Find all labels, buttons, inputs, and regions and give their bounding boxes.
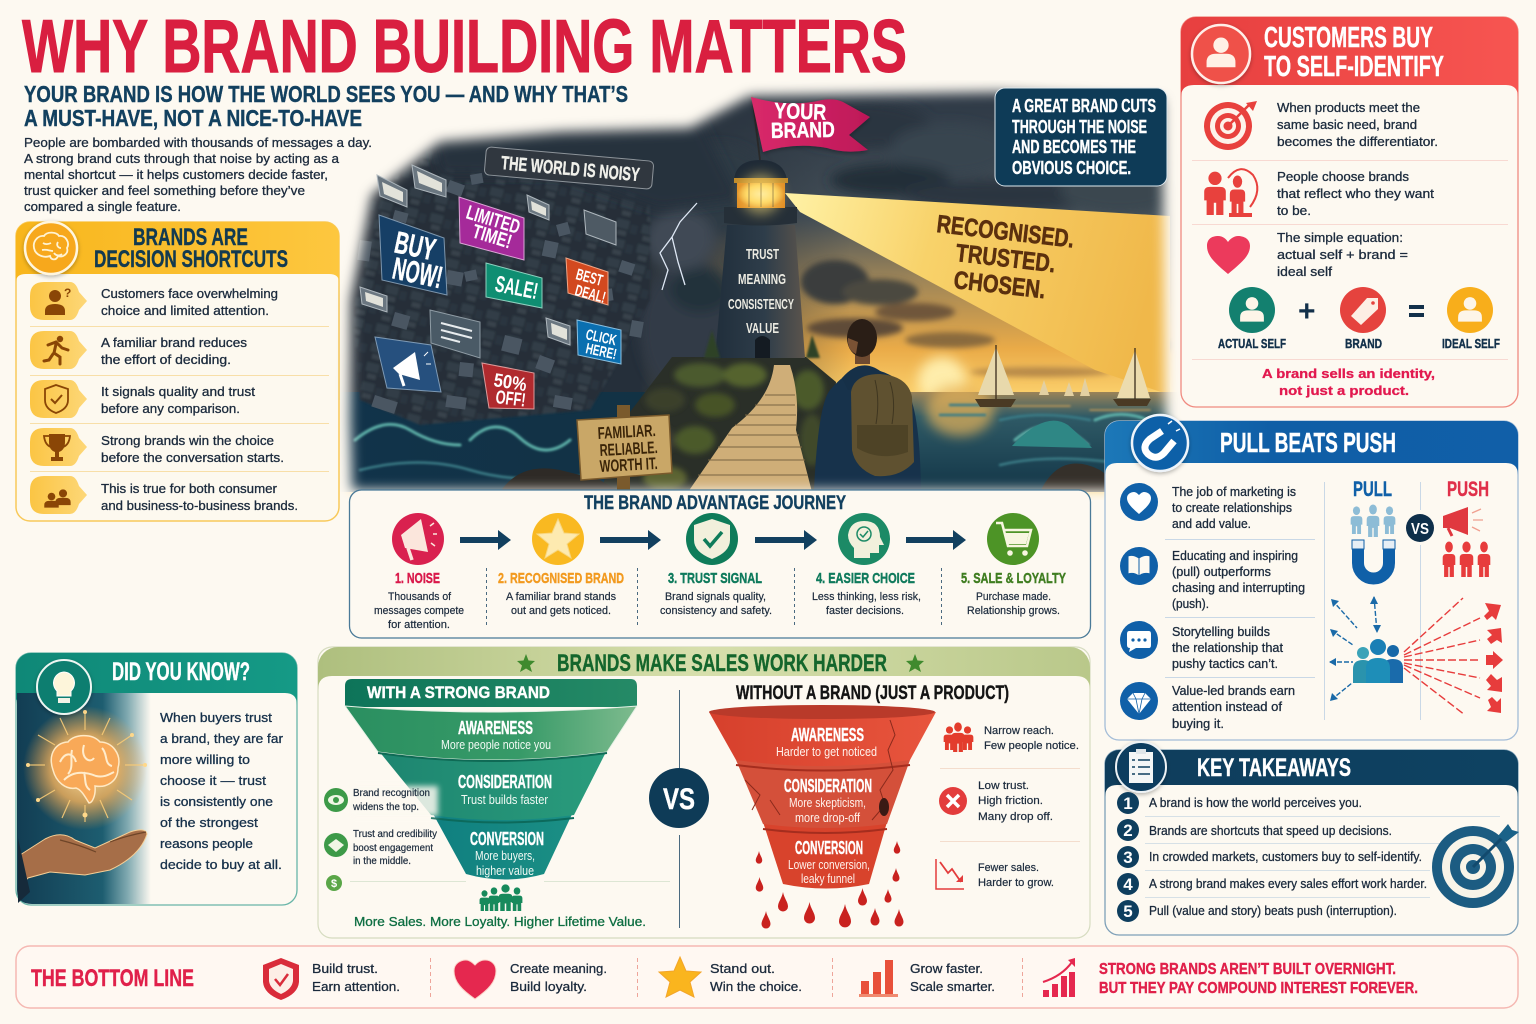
intro paragraph: People are bombarded with thousands of messages a day. bbox=[24, 135, 372, 150]
sign: best deal: BEST bbox=[574, 266, 605, 290]
item: stand out: Stand out. bbox=[710, 961, 775, 976]
sign: sale bbox=[486, 263, 542, 308]
row: consumer and b2b: This is true for both consumer bbox=[101, 481, 278, 496]
sign: buy now bbox=[379, 215, 447, 295]
takeaway 3 bbox=[1117, 846, 1422, 868]
traveller bbox=[814, 319, 921, 490]
text: decide to buy at all. bbox=[160, 857, 282, 872]
takeaway 4 bbox=[1117, 873, 1427, 895]
note: widens the top: widens the top. bbox=[352, 802, 419, 813]
item: value-led: buying it. bbox=[1172, 716, 1224, 731]
closing line bbox=[1262, 366, 1435, 398]
funnel: strong brand bbox=[345, 679, 637, 880]
message wall bbox=[352, 140, 650, 425]
text: reasons people bbox=[160, 836, 253, 851]
row: quality and trust: before any comparison. bbox=[101, 401, 240, 416]
note: fewer sales: Harder to grow. bbox=[978, 877, 1054, 889]
sign: limited time: LIMITED bbox=[464, 202, 523, 239]
note: trust in the middle: boost engagement bbox=[353, 843, 433, 854]
item: educating: (push). bbox=[1172, 596, 1209, 611]
heading: DECISION SHORTCUTS bbox=[94, 246, 288, 273]
funnel: strong brand: CONSIDERATION bbox=[458, 772, 552, 792]
intro paragraph bbox=[24, 135, 372, 214]
step 5: sale and loyalty: Purchase made. bbox=[976, 591, 1051, 603]
item: meaning bbox=[454, 960, 607, 999]
intro paragraph: A strong brand cuts through that noise by acting as a bbox=[24, 151, 340, 166]
sign: click here: CLICK bbox=[584, 326, 618, 349]
takeaway 2: 2 bbox=[1123, 821, 1133, 840]
step 2: recognised brand bbox=[498, 513, 624, 617]
note: trust in the middle bbox=[324, 829, 437, 867]
funnel: leaky bbox=[709, 705, 936, 888]
note: low trust: High friction. bbox=[978, 795, 1043, 807]
item: relationships: and add value. bbox=[1172, 516, 1251, 531]
funnel: strong brand: More buyers, bbox=[475, 848, 535, 863]
item: value-led: attention instead of bbox=[1172, 699, 1282, 714]
icon: dollar: $ bbox=[331, 878, 337, 890]
sign: click here: HERE! bbox=[584, 340, 618, 363]
sign: 50% off: 50% bbox=[492, 370, 528, 396]
funnel: strong brand: Trust builds faster bbox=[461, 792, 549, 807]
icon: magnet bbox=[1352, 540, 1395, 578]
arrow bbox=[755, 530, 817, 550]
sign: text panel bbox=[430, 310, 480, 358]
text: differentiator bbox=[1277, 100, 1438, 149]
item: educating: (pull) outperforms bbox=[1172, 564, 1271, 579]
closing line: not just a product. bbox=[1279, 383, 1409, 398]
step 3: trust signal: 3. TRUST SIGNAL bbox=[668, 571, 762, 587]
closing message: BUT THEY PAY COMPOUND INTEREST FOREVER. bbox=[1099, 980, 1418, 997]
item: storytelling: Storytelling builds bbox=[1172, 624, 1270, 639]
step 4: easier choice: faster decisions. bbox=[826, 605, 904, 617]
text: reflect bbox=[1277, 169, 1434, 218]
text: is consistently one bbox=[160, 794, 273, 809]
step 1: noise: messages compete bbox=[374, 605, 464, 617]
funnel: leaky: leaky funnel bbox=[801, 872, 855, 886]
closing message bbox=[1099, 961, 1418, 997]
sign: click here bbox=[577, 320, 621, 364]
step 4: easier choice bbox=[812, 513, 921, 617]
tower labels: TRUST bbox=[746, 246, 779, 263]
note: narrow reach bbox=[944, 722, 1079, 752]
panel: pull beats push bbox=[1105, 415, 1518, 740]
icon: attracted people bbox=[1351, 504, 1395, 537]
item: trust: Build trust. bbox=[312, 961, 378, 976]
step 2: recognised brand: out and gets noticed. bbox=[511, 605, 611, 617]
takeaway 5: Pull (value and story) beats push (interruption). bbox=[1149, 903, 1397, 918]
closing line: A brand sells an identity, bbox=[1262, 366, 1435, 381]
vs badge: VS bbox=[663, 783, 695, 816]
takeaway 4: 4 bbox=[1123, 875, 1133, 894]
note: trust in the middle: Trust and credibility bbox=[353, 829, 437, 840]
heading: CUSTOMERS BUY bbox=[1264, 22, 1433, 54]
island bbox=[600, 357, 836, 492]
row: reduces effort: A familiar brand reduces bbox=[101, 335, 248, 350]
step 1: noise: Thousands of bbox=[388, 591, 452, 603]
star left bbox=[517, 654, 535, 672]
row: win the choice: before the conversation starts. bbox=[101, 450, 284, 465]
heading: DID YOU KNOW? bbox=[112, 658, 250, 686]
star right bbox=[906, 654, 924, 672]
item: grow bbox=[859, 960, 995, 997]
takeaway 2: Brands are shortcuts that speed up decisions. bbox=[1149, 823, 1392, 838]
icon: target bbox=[1204, 101, 1257, 150]
text: more willing to bbox=[160, 752, 250, 767]
equation: actual self bbox=[1218, 287, 1286, 351]
step 4: easier choice: 4. EASIER CHOICE bbox=[816, 571, 915, 587]
icon: magnet badge bbox=[1132, 415, 1188, 471]
text: differentiator: becomes the differentiator. bbox=[1277, 134, 1438, 149]
tower labels: VALUE bbox=[746, 320, 779, 337]
equation: brand bbox=[1340, 287, 1386, 351]
arrow bbox=[460, 530, 511, 550]
step 2: recognised brand: A familiar brand stands bbox=[506, 591, 616, 603]
callout: cuts through the noise: A GREAT BRAND CUTS bbox=[1012, 96, 1156, 116]
item: grow: Grow faster. bbox=[910, 961, 983, 976]
icons: envelopes bbox=[360, 165, 616, 345]
sun bbox=[918, 357, 966, 405]
icon: audience bbox=[1353, 639, 1403, 683]
wooden sign bbox=[577, 405, 672, 490]
item: compound growth icon bbox=[1043, 958, 1075, 997]
text: a brand, they are far bbox=[160, 731, 284, 746]
text: choose it — trust bbox=[160, 773, 266, 788]
result line: More Sales. More Loyalty. Higher Lifetime Value. bbox=[354, 914, 646, 929]
funnel: leaky: More skepticism, bbox=[789, 796, 866, 810]
item: grow: Scale smarter. bbox=[910, 979, 995, 994]
intro paragraph: compared a single feature. bbox=[24, 199, 181, 214]
intro paragraph: mental shortcut — it helps customers decide faster, bbox=[24, 167, 328, 182]
equals sign bbox=[1409, 305, 1424, 317]
takeaway 1 bbox=[1117, 792, 1362, 814]
note: fewer sales: Fewer sales. bbox=[978, 862, 1039, 874]
funnel: strong brand: WITH A STRONG BRAND bbox=[367, 683, 550, 702]
step 3: trust signal: Brand signals quality, bbox=[665, 591, 766, 603]
wooden sign: FAMILIAR. bbox=[597, 421, 656, 443]
panel: the bottom line bbox=[16, 946, 1518, 1008]
tower labels: MEANING bbox=[738, 271, 786, 288]
arrow bbox=[906, 530, 966, 550]
intro paragraph: trust quicker and feel something before they’ve bbox=[24, 183, 305, 198]
light beam bbox=[785, 193, 1170, 395]
row: consumer and b2b bbox=[30, 476, 298, 514]
step 3: trust signal: consistency and safety. bbox=[660, 605, 772, 617]
item: stand out: Win the choice. bbox=[710, 979, 802, 994]
heading: KEY TAKEAWAYS bbox=[1197, 754, 1351, 782]
sign: best deal bbox=[566, 258, 608, 307]
row: quality and trust bbox=[30, 380, 255, 418]
beam text: TRUSTED. bbox=[954, 239, 1057, 278]
funnel: leaky: Lower conversion, bbox=[788, 858, 870, 872]
item: value-led bbox=[1120, 682, 1295, 731]
text: equation: The simple equation: bbox=[1277, 230, 1403, 245]
item: trust: Earn attention. bbox=[312, 979, 400, 994]
flag: your brand: YOUR bbox=[774, 98, 827, 125]
icon: target bbox=[1432, 824, 1519, 908]
item: value-led: Value-led brands earn bbox=[1172, 683, 1295, 698]
callout: cuts through the noise bbox=[995, 88, 1167, 186]
note: widens the top: Brand recognition bbox=[353, 788, 430, 799]
text bbox=[160, 710, 284, 872]
item: educating: Educating and inspiring bbox=[1172, 548, 1298, 563]
vs badge: VS bbox=[1411, 521, 1429, 538]
takeaway 3: In crowded markets, customers buy to self-identify. bbox=[1149, 849, 1422, 864]
panel: brand advantage journey bbox=[350, 490, 1090, 638]
heading: THE BRAND ADVANTAGE JOURNEY bbox=[584, 493, 846, 514]
item: relationships: The job of marketing is bbox=[1172, 484, 1296, 499]
note: narrow reach: Narrow reach. bbox=[984, 725, 1054, 737]
panel: key takeaways bbox=[1105, 742, 1519, 935]
funnel: strong brand: More people notice you bbox=[441, 737, 551, 752]
text: of the strongest bbox=[160, 815, 258, 830]
panel: did you know bbox=[16, 653, 297, 905]
note: fewer sales bbox=[936, 859, 1054, 889]
item: meaning: Build loyalty. bbox=[510, 979, 587, 994]
item: educating bbox=[1120, 547, 1305, 611]
illustration: lighthouse scene bbox=[330, 80, 1190, 500]
sea bbox=[910, 392, 1176, 490]
lighthouse tower bbox=[715, 225, 805, 358]
vs badge bbox=[649, 768, 709, 828]
icon: clipboard badge bbox=[1116, 742, 1166, 792]
arrows: push bbox=[1404, 598, 1480, 715]
heading: TO SELF-IDENTIFY bbox=[1264, 51, 1444, 83]
note: trust in the middle: in the middle. bbox=[353, 856, 411, 867]
beam text: CHOSEN. bbox=[952, 266, 1047, 304]
subtitle: YOUR BRAND IS HOW THE WORLD SEES YOU — AND WHY THAT’S bbox=[24, 81, 628, 107]
note: narrow reach: Few people notice. bbox=[984, 740, 1079, 752]
callout: cuts through the noise: OBVIOUS CHOICE. bbox=[1012, 158, 1131, 178]
takeaway 5 bbox=[1117, 900, 1397, 922]
icon: person badge bbox=[1192, 25, 1250, 83]
push label: PUSH bbox=[1447, 478, 1489, 501]
row: overwhelming choice: ? bbox=[64, 286, 71, 300]
lightning bbox=[660, 203, 697, 290]
wooden sign: RELIABLE. bbox=[599, 438, 658, 460]
panel: customers buy to self-identify bbox=[1181, 17, 1518, 407]
item: storytelling: the relationship that bbox=[1172, 640, 1283, 655]
funnel: strong brand: higher value bbox=[476, 863, 534, 878]
sign: megaphone bbox=[375, 337, 441, 392]
subtitle: A MUST-HAVE, NOT A NICE-TO-HAVE bbox=[24, 105, 362, 131]
subtitle bbox=[24, 81, 628, 131]
text: reflect: that reflect who they want bbox=[1277, 186, 1434, 201]
callout: cuts through the noise: THROUGH THE NOISE bbox=[1012, 117, 1147, 137]
icon: megaphone bbox=[1443, 507, 1483, 536]
icon: customer group bbox=[480, 884, 522, 911]
step 5: sale and loyalty bbox=[961, 513, 1066, 617]
icon: brain bbox=[25, 222, 77, 274]
equation: ideal self: IDEAL SELF bbox=[1442, 336, 1500, 351]
step 4: easier choice: Less thinking, less risk, bbox=[812, 591, 921, 603]
stone path bbox=[688, 365, 812, 492]
equation: ideal self bbox=[1442, 287, 1500, 351]
row: reduces effort bbox=[30, 331, 248, 369]
takeaway 4: A strong brand makes every sales effort work harder. bbox=[1149, 876, 1427, 891]
item: meaning: Create meaning. bbox=[510, 961, 607, 976]
item: stand out bbox=[659, 957, 802, 997]
tower labels bbox=[728, 246, 794, 337]
note: low trust bbox=[939, 780, 1053, 823]
funnel: leaky: CONSIDERATION bbox=[784, 776, 872, 796]
equation: brand: BRAND bbox=[1345, 336, 1382, 351]
boats bbox=[975, 345, 1151, 407]
text: differentiator: When products meet the bbox=[1277, 100, 1420, 115]
vs badge bbox=[1406, 514, 1434, 542]
flag: your brand: BRAND bbox=[771, 117, 835, 143]
heading bbox=[1264, 22, 1444, 83]
step 5: sale and loyalty: 5. SALE & LOYALTY bbox=[961, 571, 1066, 587]
sign: limited time: TIME! bbox=[470, 221, 514, 253]
illustration: brain in hand bbox=[17, 693, 155, 904]
row: overwhelming choice: choice and limited attention. bbox=[101, 303, 269, 318]
sign: buy now: NOW! bbox=[390, 251, 446, 295]
sign: buy now: BUY bbox=[392, 225, 439, 267]
item: storytelling bbox=[1120, 621, 1283, 671]
step 1: noise: for attention. bbox=[388, 619, 450, 631]
pull label: PULL bbox=[1353, 478, 1392, 501]
arrows: pull bbox=[1330, 597, 1377, 700]
funnel: leaky: Harder to get noticed bbox=[776, 745, 877, 759]
row: consumer and b2b: and business-to-business brands. bbox=[101, 498, 298, 513]
callout: cuts through the noise: AND BECOMES THE bbox=[1012, 137, 1136, 157]
equation: actual self: ACTUAL SELF bbox=[1218, 336, 1286, 351]
row: overwhelming choice bbox=[30, 282, 278, 320]
takeaway 1: A brand is how the world perceives you. bbox=[1149, 795, 1362, 810]
red drips bbox=[756, 841, 904, 929]
sign: the world is noisy: THE WORLD IS NOISY bbox=[500, 153, 641, 186]
item: trust bbox=[263, 958, 400, 1000]
sign: 50% off bbox=[482, 363, 534, 412]
heading: without a brand: WITHOUT A BRAND (JUST A PRODUCT) bbox=[736, 683, 1009, 704]
row: win the choice: Strong brands win the choice bbox=[101, 433, 274, 448]
text: differentiator: same basic need, brand bbox=[1277, 117, 1417, 132]
row: quality and trust: It signals quality and trust bbox=[101, 384, 255, 399]
sign: sale: SALE! bbox=[493, 270, 540, 304]
flag: your brand bbox=[751, 97, 870, 152]
main title: WHY BRAND BUILDING MATTERS bbox=[22, 4, 907, 88]
takeaway 2 bbox=[1117, 819, 1392, 841]
tower labels: CONSISTENCY bbox=[728, 296, 794, 313]
text: equation bbox=[1277, 230, 1408, 279]
icon: dollar bbox=[326, 875, 342, 891]
heading: THE BOTTOM LINE bbox=[31, 965, 194, 992]
takeaway 3: 3 bbox=[1123, 848, 1133, 867]
step 2: recognised brand: 2. RECOGNISED BRAND bbox=[498, 571, 624, 587]
note: widens the top bbox=[324, 786, 438, 816]
step 1: noise: 1. NOISE bbox=[395, 571, 440, 587]
sign: limited time bbox=[459, 197, 524, 260]
text: equation: ideal self bbox=[1277, 264, 1332, 279]
heading: BRANDS MAKE SALES WORK HARDER bbox=[557, 650, 887, 677]
item: relationships bbox=[1120, 483, 1296, 531]
icon: heart bbox=[1207, 236, 1250, 274]
step 5: sale and loyalty: Relationship grows. bbox=[967, 605, 1060, 617]
sign: 50% off: OFF! bbox=[494, 387, 527, 412]
text: reflect: to be. bbox=[1277, 203, 1311, 218]
funnel: strong brand: AWARENESS bbox=[458, 718, 533, 738]
row: overwhelming choice: Customers face overwhelming bbox=[101, 286, 278, 301]
text: reflect: People choose brands bbox=[1277, 169, 1410, 184]
heading bbox=[94, 224, 288, 273]
takeaway 5: 5 bbox=[1123, 902, 1133, 921]
sign: best deal: DEAL! bbox=[573, 282, 607, 307]
panel: brands make sales work harder bbox=[318, 647, 1090, 938]
funnel: leaky: CONVERSION bbox=[795, 838, 863, 858]
wooden sign: WORTH IT. bbox=[599, 454, 658, 476]
sign: the world is noisy bbox=[484, 147, 654, 189]
takeaway 1: 1 bbox=[1123, 794, 1133, 813]
icon: red people bbox=[1443, 542, 1490, 577]
closing message: STRONG BRANDS AREN’T BUILT OVERNIGHT. bbox=[1099, 961, 1396, 978]
text: When buyers trust bbox=[160, 710, 272, 725]
text: equation: actual self + brand = bbox=[1277, 247, 1408, 262]
panel: brands are decision shortcuts bbox=[16, 222, 339, 521]
item: educating: chasing and interrupting bbox=[1172, 580, 1305, 595]
heading: BRANDS ARE bbox=[133, 224, 248, 251]
arrow bbox=[600, 530, 661, 550]
note: low trust: Many drop off. bbox=[978, 811, 1053, 823]
icon: mirror people bbox=[1204, 169, 1257, 217]
step 3: trust signal bbox=[660, 513, 772, 617]
row: reduces effort: the effort of deciding. bbox=[101, 352, 231, 367]
heading: PULL BEATS PUSH bbox=[1220, 427, 1396, 458]
funnel: leaky: more drop-off bbox=[795, 811, 860, 825]
item: storytelling: pushy tactics can’t. bbox=[1172, 656, 1278, 671]
beam text bbox=[935, 210, 1076, 304]
note: low trust: Low trust. bbox=[978, 780, 1029, 792]
icon: light bulb bbox=[37, 660, 91, 714]
plus sign: + bbox=[1298, 295, 1316, 328]
funnel: strong brand: CONVERSION bbox=[470, 829, 544, 849]
storm clouds bbox=[642, 110, 1156, 376]
item: relationships: to create relationships bbox=[1172, 500, 1292, 515]
funnel: leaky: AWARENESS bbox=[791, 725, 864, 745]
beam text: RECOGNISED. bbox=[935, 210, 1076, 254]
row: win the choice bbox=[30, 428, 284, 466]
step 1: noise bbox=[374, 513, 464, 631]
